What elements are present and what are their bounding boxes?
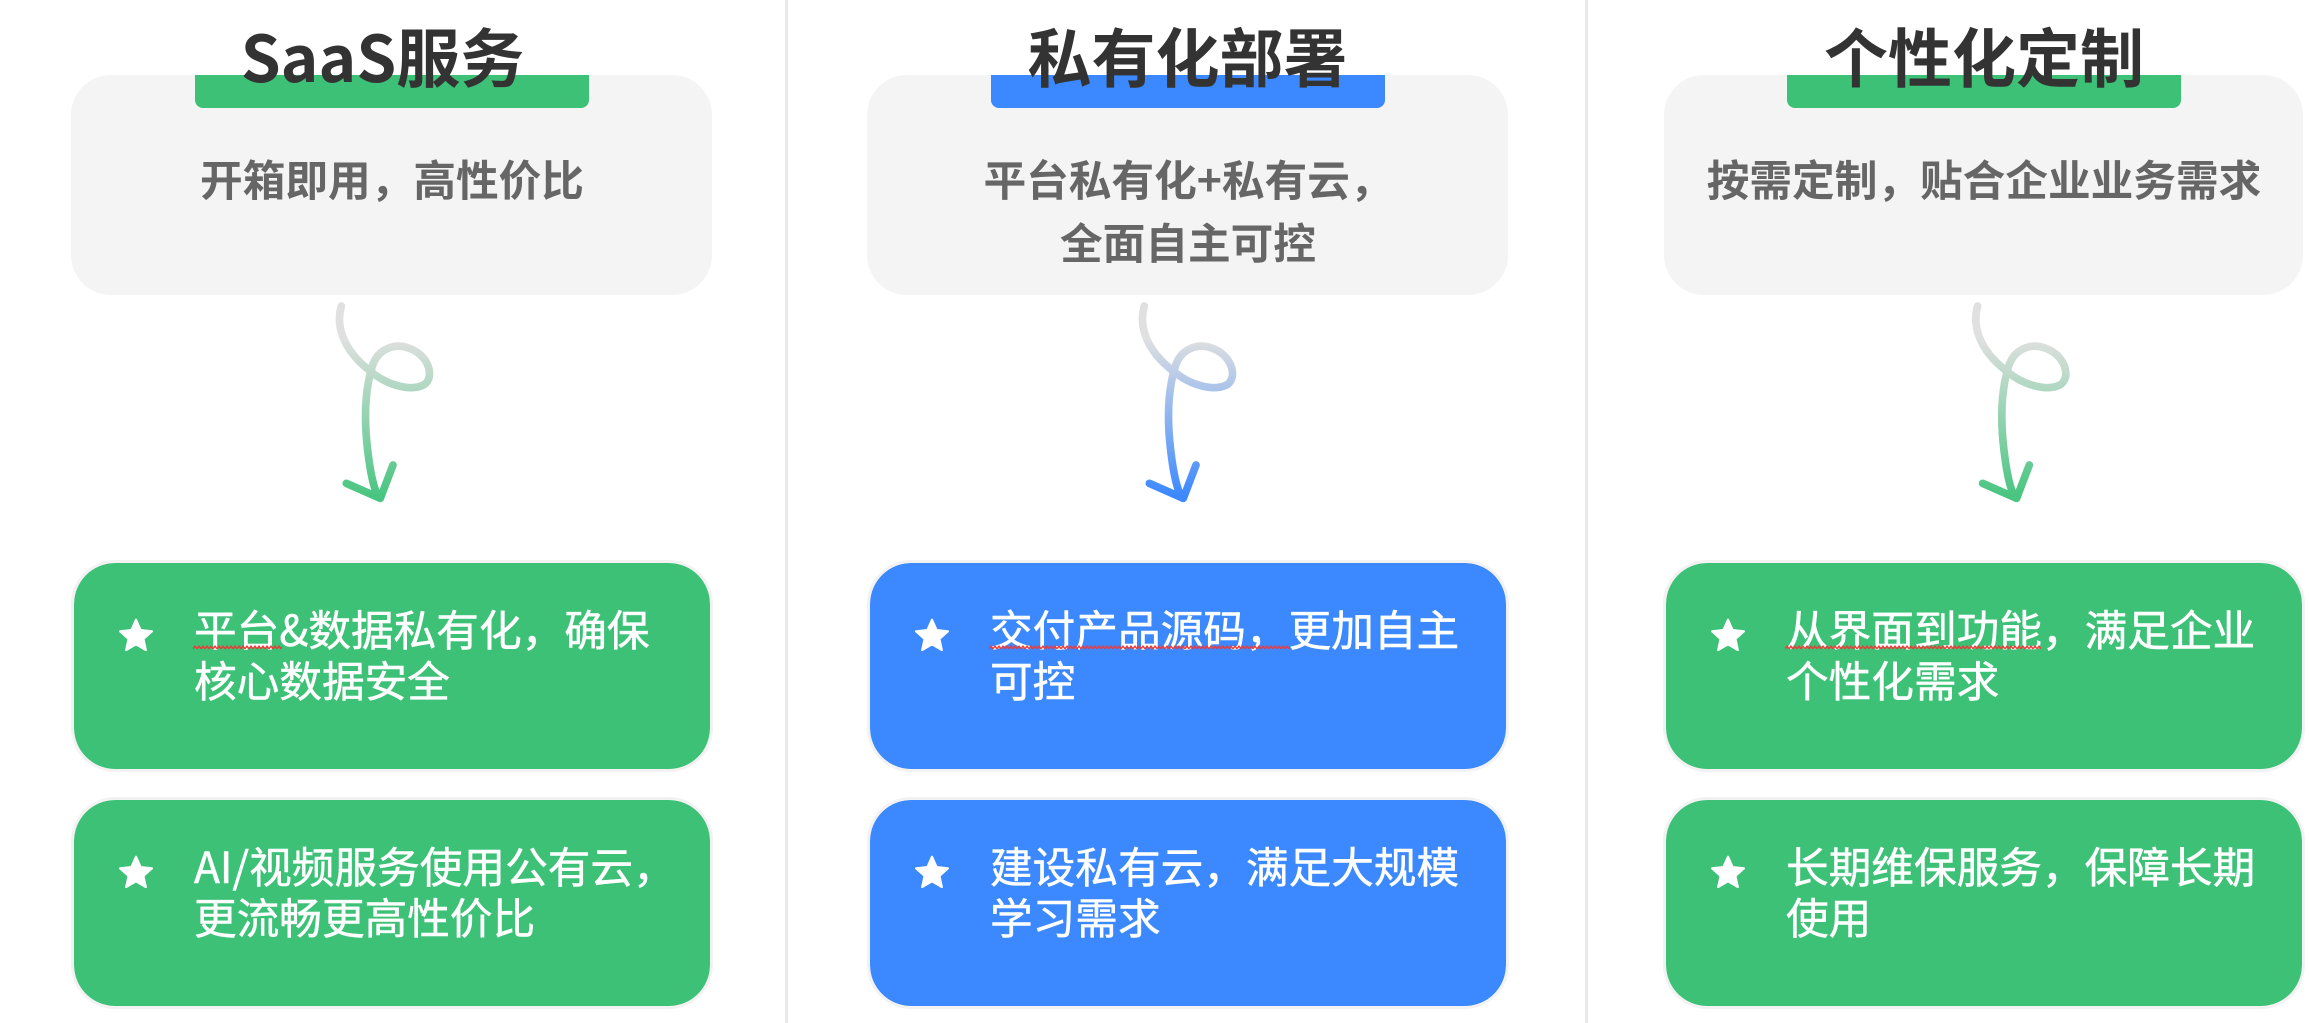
text: bullet copy: 平台&数据私有化，确保 [194, 598, 650, 658]
spellcheck wavy underline [989, 645, 1290, 650]
text: bullet copy [194, 598, 650, 710]
text: customization subtitle: 按需定制，贴合企业业务需求 [1707, 148, 2261, 208]
icon: star [119, 618, 153, 652]
text: bullet copy: AI/视频服务使用公有云， [194, 834, 676, 896]
spellcheck wavy underline [1785, 645, 2041, 650]
panel: customization summary card [1664, 75, 2303, 295]
text: bullet copy: 从界面到功能，满足企业 [1786, 598, 2255, 658]
heading: SaaS服务: SaaS服务 [241, 8, 524, 100]
arrow: green curly arrow [336, 302, 434, 502]
text: bullet copy [1786, 834, 2255, 947]
column: 个性化定制 [1663, 8, 2305, 1009]
card: SaaS bullet two [70, 797, 712, 1009]
text: bullet copy: 学习需求 [990, 886, 1161, 947]
text: private deployment subtitle [983, 148, 1393, 272]
card: private deployment bullet one [866, 560, 1508, 772]
text: bullet copy: 核心数据安全 [194, 649, 450, 710]
column: 私有化部署 [867, 8, 1509, 1009]
icon: star [1711, 618, 1745, 652]
card: SaaS bullet one [70, 560, 712, 772]
text: bullet copy: 建设私有云，满足大规模 [990, 834, 1459, 896]
text: bullet copy: 长期维保服务，保障长期 [1786, 834, 2255, 896]
text: private deployment subtitle: 平台私有化+私有云， [983, 148, 1393, 208]
text: bullet copy: 可控 [990, 649, 1075, 710]
card: customization bullet two [1662, 797, 2304, 1009]
column: SaaS服务 [71, 8, 713, 1009]
icon: star [915, 618, 949, 652]
heading: 私有化部署: 私有化部署 [1028, 8, 1348, 100]
text: bullet copy: 更流畅更高性价比 [194, 886, 535, 947]
accent bar: green [1787, 75, 2181, 108]
card: private deployment bullet two [866, 797, 1508, 1009]
heading: 个性化定制: 个性化定制 [1824, 8, 2144, 100]
spellcheck wavy underline [193, 645, 282, 650]
card: customization bullet one [1662, 560, 2304, 772]
icon: star [915, 856, 949, 888]
panel: private deployment summary card [867, 75, 1508, 295]
panel: SaaS summary card [71, 75, 712, 295]
text: bullet copy: 使用 [1786, 886, 1871, 947]
text: bullet copy: 个性化需求 [1786, 649, 1999, 710]
text: private deployment subtitle: 全面自主可控 [1060, 211, 1316, 272]
text: SaaS subtitle: 开箱即用，高性价比 [200, 148, 584, 208]
text: bullet copy: 交付产品源码，更加自主 [990, 598, 1459, 658]
text: bullet copy [194, 834, 676, 947]
icon: star [119, 856, 153, 888]
accent bar: green [195, 75, 589, 108]
text: bullet copy [990, 834, 1459, 947]
arrow: blue curly arrow [1138, 302, 1236, 502]
text: bullet copy [1786, 598, 2255, 710]
text: bullet copy [990, 598, 1459, 710]
arrow: green curly arrow [1972, 302, 2070, 502]
accent bar: blue [991, 75, 1385, 108]
icon: star [1711, 856, 1745, 888]
